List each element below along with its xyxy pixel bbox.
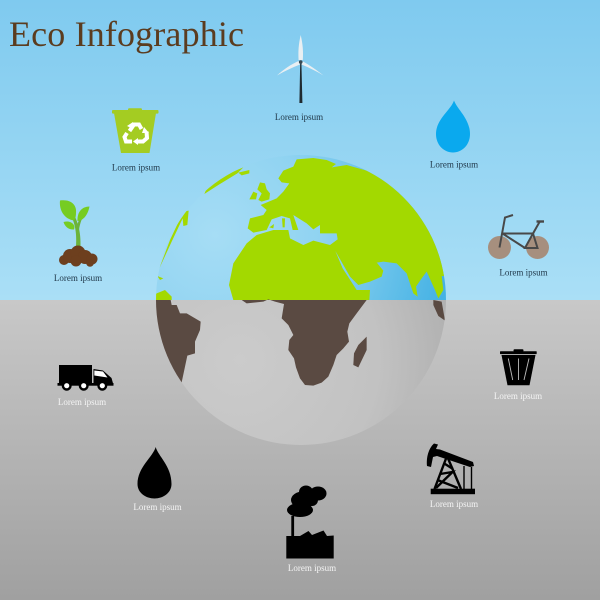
icon: water drop <box>436 100 470 152</box>
Indonesia fragments <box>433 300 445 321</box>
factory item <box>286 486 336 573</box>
icon: oil pump <box>427 444 475 494</box>
oil drop item <box>133 447 182 512</box>
soil mound <box>59 246 98 267</box>
Madagascar <box>353 337 367 367</box>
title: Eco Infographic <box>9 14 244 54</box>
label: water drop: Lorem ipsum <box>430 160 478 170</box>
globe <box>150 150 457 450</box>
green continents upper half <box>150 158 457 300</box>
South America <box>156 300 201 382</box>
Africa south <box>242 299 367 386</box>
water drop item <box>430 100 478 170</box>
recycle arrows <box>124 124 147 142</box>
label: trash can: Lorem ipsum <box>494 391 542 401</box>
icon: trash can <box>500 349 537 385</box>
brown continents lower half <box>150 299 445 386</box>
icon: bicycle <box>488 215 549 259</box>
label: truck: Lorem ipsum <box>58 397 106 407</box>
label: factory: Lorem ipsum <box>288 563 336 573</box>
label: recycling bin: Lorem ipsum <box>112 162 160 172</box>
label: oil pump: Lorem ipsum <box>430 499 478 509</box>
smoke <box>287 503 313 517</box>
label: wind turbine: Lorem ipsum <box>275 112 323 122</box>
label: seedling: Lorem ipsum <box>54 273 102 283</box>
icon: factory <box>286 486 334 558</box>
plant item <box>54 200 102 283</box>
trash can item <box>494 349 542 401</box>
oil pump item <box>427 444 478 509</box>
icon: seedling <box>59 200 98 267</box>
label: oil drop: Lorem ipsum <box>133 502 182 512</box>
bicycle item <box>488 215 549 278</box>
globe lower shaded half <box>182 300 446 445</box>
sky background <box>0 0 600 300</box>
globe upper ocean <box>150 150 450 300</box>
icon: truck <box>58 365 114 390</box>
truck wheels <box>63 382 106 390</box>
ground background <box>0 300 600 600</box>
truck item <box>58 365 114 407</box>
icon: recycling bin <box>112 108 158 153</box>
wind turbine item <box>275 35 324 122</box>
recycling bin item <box>112 108 160 172</box>
icon: wind turbine <box>277 35 324 103</box>
icon: oil drop <box>138 447 172 498</box>
label: bicycle: Lorem ipsum <box>499 268 548 278</box>
